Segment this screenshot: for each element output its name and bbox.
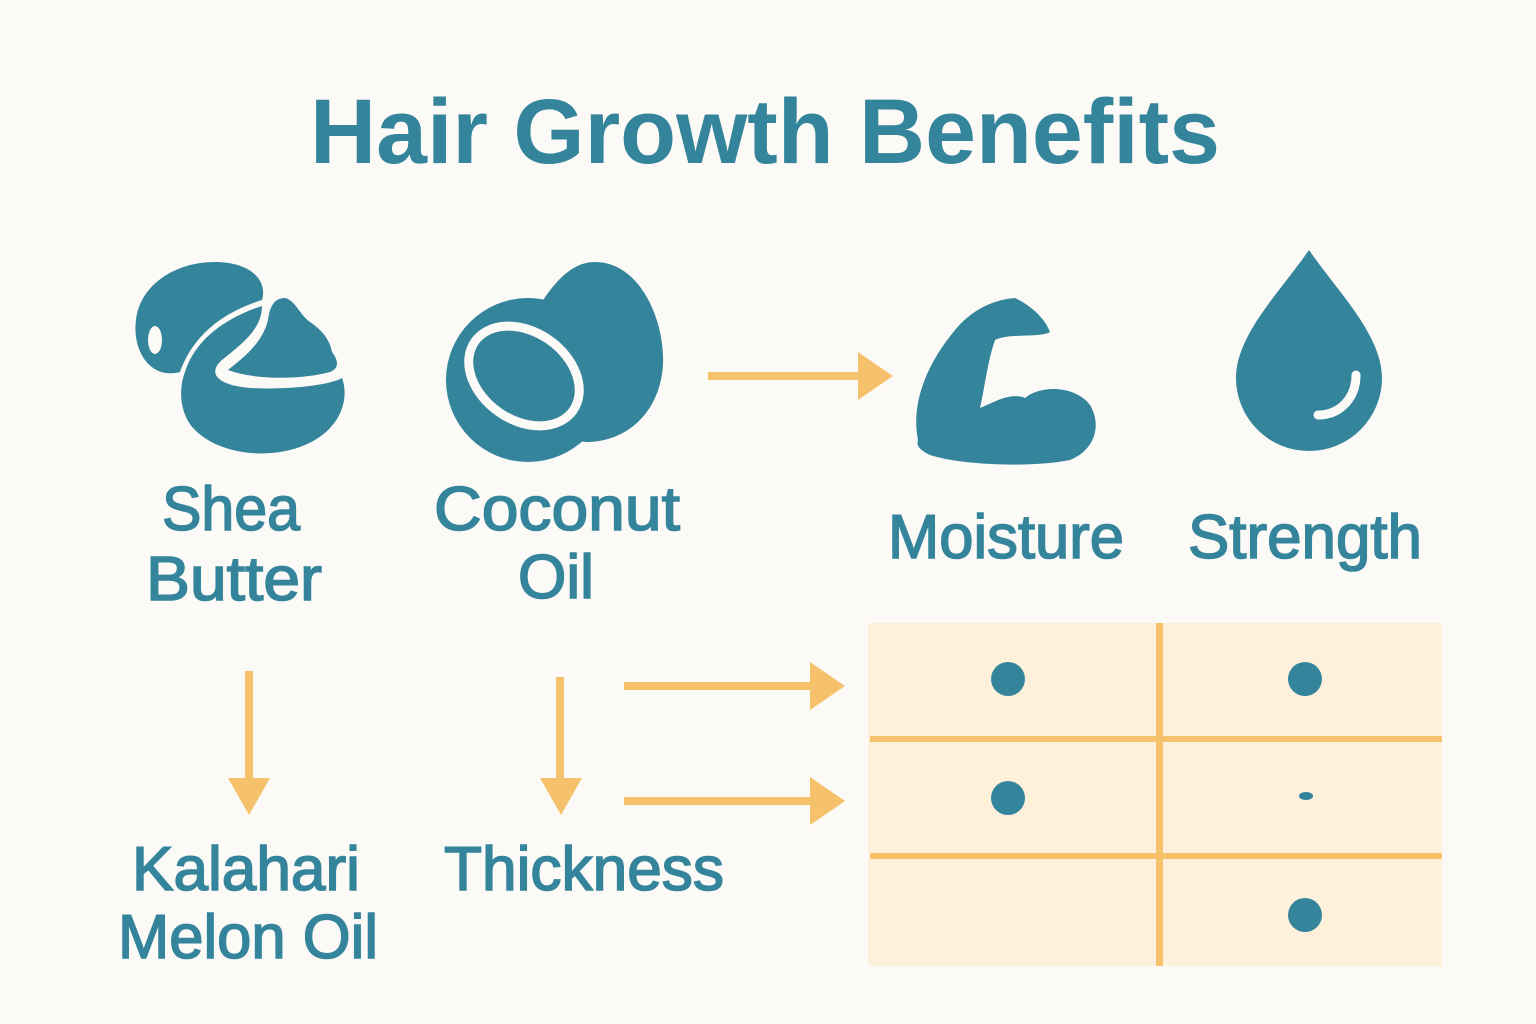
label: shea butter: Butter — [146, 545, 322, 614]
label: coconut oil: Oil — [518, 543, 594, 612]
title: Hair Growth Benefits — [310, 81, 1220, 183]
icon: muscle — [916, 298, 1096, 465]
label: coconut oil — [434, 475, 680, 612]
icon: coconut — [446, 262, 663, 462]
arrow: right lower — [624, 777, 845, 825]
label: moisture: Moisture — [888, 503, 1124, 572]
arrow: down middle — [540, 677, 582, 815]
label: shea butter — [146, 475, 322, 614]
icon: drop — [1236, 250, 1382, 451]
label: shea butter: Shea — [162, 475, 300, 544]
icon: shea butter — [135, 262, 345, 453]
label: strength: Strength — [1188, 503, 1422, 572]
label: kalahari melon oil: Kalahari — [132, 835, 360, 904]
label: coconut oil: Coconut — [434, 475, 680, 544]
table — [868, 623, 1442, 966]
arrow: right upper — [624, 662, 845, 710]
arrow: top right — [708, 352, 893, 400]
label: thickness: Thickness — [444, 835, 724, 904]
label: kalahari melon oil — [118, 835, 378, 972]
arrow: down left — [228, 671, 270, 815]
label: kalahari melon oil: Melon Oil — [118, 903, 378, 972]
